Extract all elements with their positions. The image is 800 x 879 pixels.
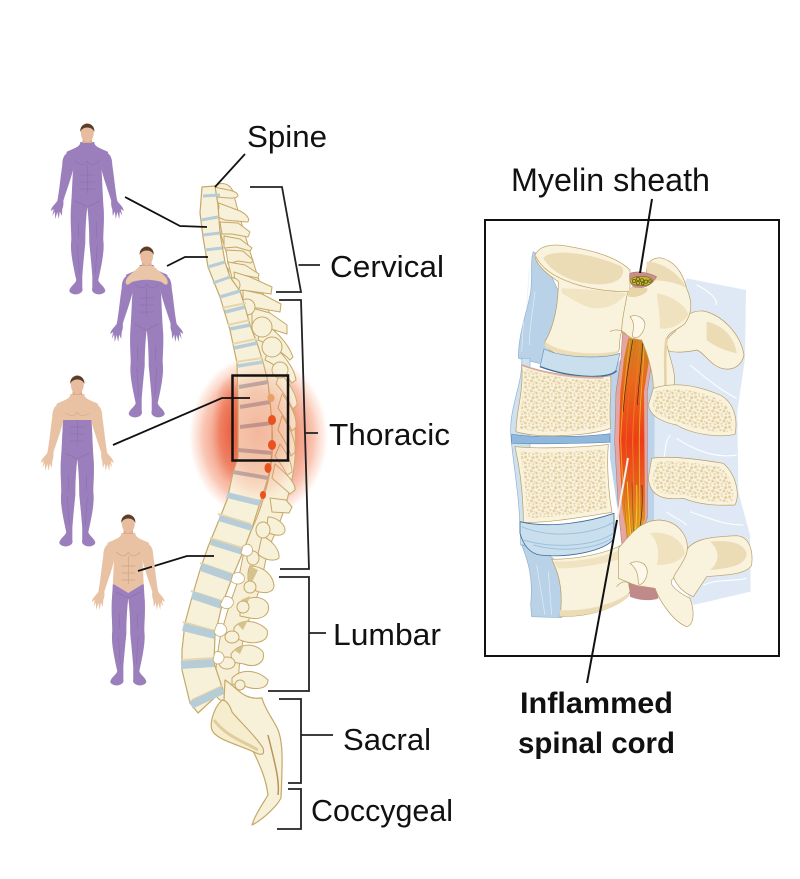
- figure: upper thoracic level, purple below the shoulders: [110, 246, 183, 417]
- spinous processes: cervical and thoracic: [215, 187, 297, 560]
- bracket: cervical: [250, 187, 320, 292]
- lower disc: [520, 513, 614, 556]
- lumbar shadows: [234, 566, 258, 654]
- figure: lumbar level, purple below the waist: [92, 514, 165, 685]
- bracket: sacral: [279, 699, 333, 783]
- bottom lamina and articular process: [618, 520, 693, 627]
- label: Inflammed spinal cord: [518, 687, 675, 760]
- facet centres: [208, 204, 225, 275]
- middle disc: [512, 434, 610, 444]
- myelin sheath cross-section: [628, 272, 657, 297]
- top vertebra body: [535, 245, 630, 358]
- label: Coccygeal: Coccygeal: [311, 793, 453, 828]
- bracket: thoracic: [279, 300, 318, 569]
- articular facets: cervical and upper thoracic: [205, 200, 288, 378]
- panel: enlarged vertebrae section: [485, 220, 779, 656]
- posterior spongy process, lower: [648, 457, 737, 505]
- figure: thoracic level, purple below the chest: [41, 375, 114, 546]
- spinal cord with inflammation: [615, 331, 652, 546]
- glow: inflamed area behind spine: [188, 354, 328, 520]
- top vertebra transverse process: [666, 311, 744, 369]
- blue canal lining: [610, 358, 655, 525]
- anterior ligament top: [518, 252, 562, 365]
- shadow under the vertebral edges: [182, 303, 262, 700]
- line from lumbar figure drawn above skin: [138, 567, 152, 571]
- label: Cervical: Cervical: [330, 249, 444, 284]
- cutaway illustration: [511, 245, 752, 627]
- intervertebral discs: [181, 195, 272, 705]
- figure: cervical level, purple from neck down: [51, 123, 124, 294]
- bottom transverse process: [672, 536, 752, 597]
- bottom vertebra body: [552, 545, 630, 617]
- inflammation spots: [260, 394, 276, 499]
- spinous processes: lumbar: [231, 566, 274, 688]
- upper disc: [540, 349, 620, 376]
- label: Inflammed spinal cord: spinal cord: [518, 727, 675, 760]
- posterior spongy process, upper: [648, 385, 736, 436]
- top vertebra lamina and articular process: [622, 258, 691, 393]
- overlay glow tint on the vertebrae: [212, 360, 304, 504]
- articular connectors: [219, 522, 270, 690]
- leader lines from figures to the spine: [113, 154, 250, 571]
- anterior ligament bottom: [522, 545, 562, 618]
- label: Myelin sheath: Myelin sheath: [511, 162, 710, 198]
- label: Spine: Spine: [247, 119, 327, 154]
- label: Thoracic: Thoracic: [329, 417, 450, 452]
- sacrum and coccyx: [211, 680, 282, 825]
- leader: Myelin sheath: [640, 199, 652, 273]
- upper spongy vertebra: [516, 365, 611, 436]
- anterior ligament middle: [511, 358, 530, 545]
- illustration: side-view spine: [181, 186, 304, 825]
- leader: Inflammed spinal cord: [587, 458, 628, 683]
- infographic: spine and inflamed spinal cord: [40, 123, 780, 830]
- lower spongy vertebra: [515, 444, 612, 522]
- label: Inflammed spinal cord: Inflammed: [520, 687, 673, 720]
- label: Lumbar: Lumbar: [333, 617, 441, 652]
- vertebral column bodies: [182, 186, 272, 713]
- spinal foramina: [213, 544, 253, 664]
- dura at bottom: [628, 582, 658, 600]
- lamina column behind the spine: [222, 195, 284, 690]
- label: Sacral: Sacral: [343, 722, 431, 757]
- bracket: coccygeal: [277, 789, 301, 829]
- detail box around thoracic section: [232, 376, 288, 460]
- bracket: lumbar: [268, 577, 326, 691]
- posterior ligament: [650, 278, 751, 605]
